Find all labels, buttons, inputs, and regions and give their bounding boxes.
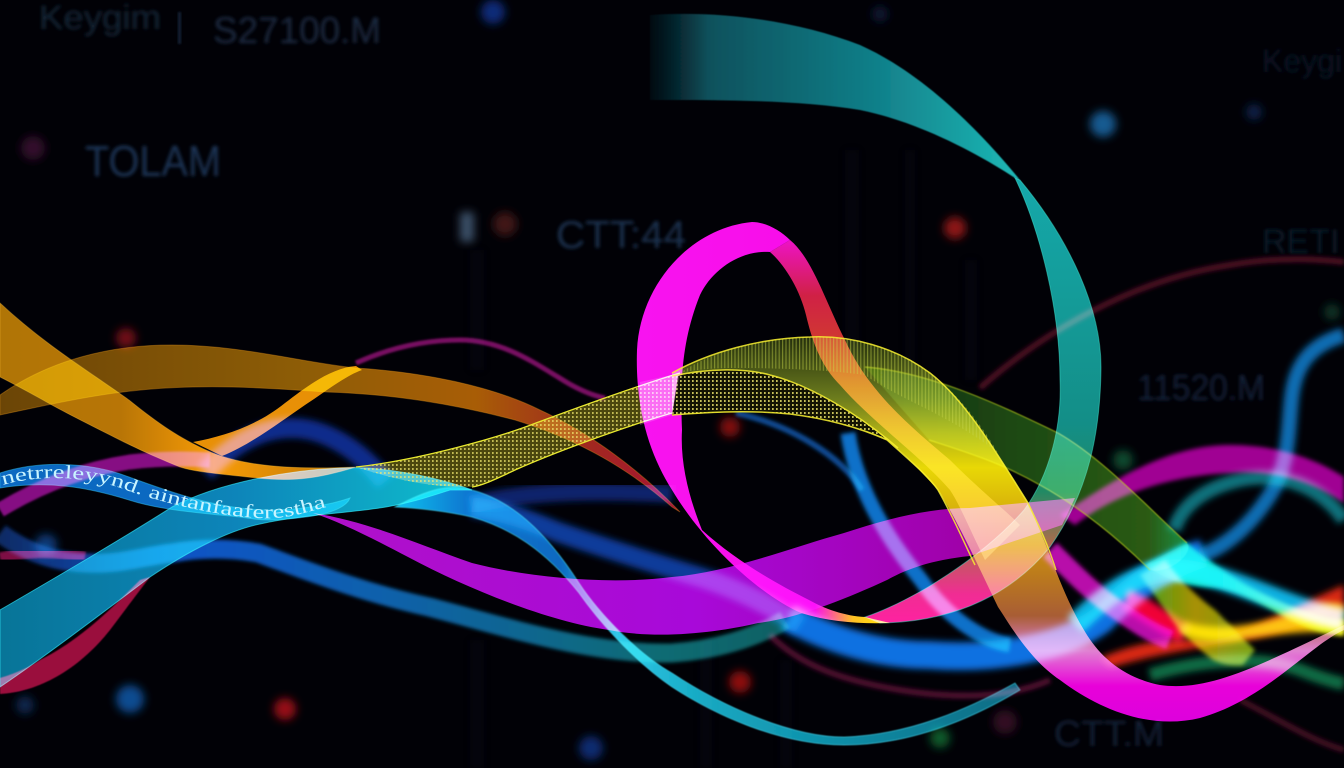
ribbon: purple band: [313, 498, 1075, 635]
ribbon: bright green strand to the right: [1145, 543, 1344, 636]
ribbon: green main band: [865, 367, 1189, 571]
teal loop right: [1174, 478, 1344, 530]
ribbon mesh dark dotted fold: [672, 370, 885, 438]
wide blue ribbon lower right: [788, 553, 1204, 656]
blue back ribbon upper: [470, 492, 672, 505]
ribbon mesh base: [356, 373, 680, 487]
ribbon yellow edges: [672, 337, 1056, 570]
ribbon text: [3, 478, 340, 518]
deep blue arc left: [205, 428, 385, 482]
label: total: TOLAM: [85, 137, 221, 186]
ribbon text label: netrreleyynd. aintanfaaferestha: [1, 465, 326, 518]
ribbon mesh dots: [672, 370, 885, 438]
ribbon: magenta loop: [637, 222, 890, 623]
thin dark magenta line: [356, 340, 605, 398]
faint background chart bars: [470, 150, 977, 768]
dark red lower right: [1240, 700, 1344, 750]
dark red lower curve: [770, 635, 1050, 696]
ribbon: mesh band in upper loop: [672, 337, 1056, 570]
blurred magenta wave right: [1060, 445, 1344, 525]
blue back ribbon lower: [472, 507, 800, 625]
separator mark: [178, 12, 181, 44]
label: reti: RETI: [1262, 223, 1339, 261]
blurred red orange streak: [1100, 585, 1344, 668]
label: value: S27100.M: [213, 10, 381, 51]
label: ctt 44: CTT:44: [556, 214, 686, 257]
blurred red spot: [1125, 600, 1185, 635]
ribbon: teal arc descending to pink: [865, 178, 1101, 623]
ribbon: green edge lines: [865, 367, 1187, 570]
ribbon: olive strand dropping right: [1140, 560, 1255, 665]
blue vertical ribbon: [848, 433, 1010, 645]
ribbon: bright orange twist: [193, 366, 362, 456]
ribbon mesh vertical hatch: [680, 337, 998, 453]
left pink stripe: [0, 553, 85, 558]
label: ctt m: CTT.M: [1054, 713, 1164, 754]
blurred magenta descending right: [1050, 550, 1170, 640]
ribbon: cyan rising band: [0, 468, 472, 687]
thin dark red arc upper right: [980, 259, 1344, 388]
blurred green streak: [1150, 661, 1344, 684]
pale highlight in left of the loop: [640, 373, 680, 425]
thin blue arc through magenta loop: [736, 413, 862, 490]
ribbon: cyan to teal descending band: [395, 487, 1020, 745]
blue lower ribbon: [0, 533, 785, 653]
blurred cyan streak: [1075, 570, 1344, 625]
blue curve right: [1200, 335, 1344, 556]
ribbon: blue text band: [0, 464, 350, 520]
ribbon: big yellow to magenta band: [672, 337, 1344, 722]
left dark magenta ribbon: [0, 459, 210, 510]
ribbon: red strand of the loop: [770, 240, 1020, 560]
label: top right: Keygi: [1262, 43, 1342, 79]
ribbon: mesh yellow rising band: [356, 373, 680, 487]
ribbon: orange falling band: [0, 303, 356, 480]
label: 11520: 11520.M: [1137, 367, 1265, 408]
blurred yellow streak: [1178, 603, 1344, 641]
ribbon: orange band top left: [0, 345, 680, 512]
ribbon: teal arc upper: [650, 14, 1020, 180]
ribbon mesh dots: [356, 373, 680, 487]
ribbon mesh edge: [356, 373, 680, 487]
crimson ribbon lower left: [0, 577, 150, 694]
label: keygim: Keygim: [39, 0, 161, 37]
